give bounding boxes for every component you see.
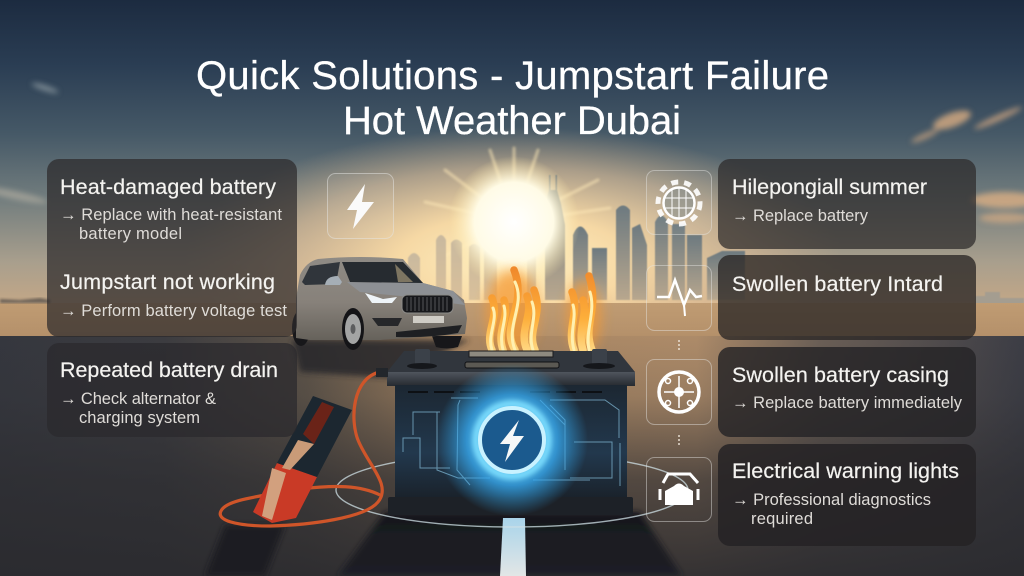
solution text bbox=[60, 390, 216, 427]
solution text: required bbox=[751, 510, 813, 528]
clouds bbox=[0, 81, 1024, 223]
battery body bbox=[395, 385, 627, 498]
panel: right three bbox=[718, 347, 976, 437]
panel: right two bbox=[718, 255, 976, 340]
icon: lightning box bbox=[328, 174, 394, 238]
car body bbox=[296, 257, 467, 340]
car windows bbox=[302, 262, 340, 285]
solution text: charging system bbox=[79, 409, 200, 427]
icon: circuit wheel box bbox=[646, 360, 712, 424]
shadow of car bbox=[292, 340, 470, 378]
shadow of clamp bbox=[205, 525, 285, 576]
title: Quick Solutions - Jumpstart Failure bbox=[196, 54, 829, 98]
skyline of Dubai bbox=[408, 175, 1024, 310]
circuit traces bbox=[403, 398, 620, 486]
arrow: connector to warning icon bbox=[678, 435, 680, 447]
arrow: connector to circuit icon bbox=[678, 340, 680, 352]
solution text bbox=[732, 491, 931, 528]
sun rays bbox=[425, 148, 610, 258]
hologram ring around battery bbox=[336, 453, 688, 527]
lightning bolt bbox=[500, 420, 524, 462]
solution text: → Perform battery voltage test bbox=[60, 302, 287, 320]
panel: left bottom bbox=[47, 343, 297, 437]
shadow under battery bbox=[338, 512, 682, 576]
glowing core bbox=[436, 364, 588, 516]
icon: pulse box bbox=[646, 266, 712, 330]
icon: gear globe box bbox=[646, 170, 712, 234]
heading: Swollen battery Intard bbox=[732, 272, 943, 296]
heading: Hilepongiall summer bbox=[732, 175, 927, 199]
road centre stripe bbox=[500, 518, 526, 576]
jumper clamp bbox=[253, 396, 352, 523]
heading: Swollen battery casing bbox=[732, 363, 949, 387]
background: desert sky at dusk bbox=[0, 0, 1024, 397]
icon: warning light box bbox=[646, 458, 712, 522]
panel: left top bbox=[47, 159, 297, 337]
title bbox=[196, 54, 829, 143]
desert sand bbox=[0, 298, 1024, 337]
panel: right four bbox=[718, 444, 976, 546]
solution text: → Replace battery bbox=[732, 207, 869, 225]
sun bbox=[448, 156, 580, 288]
flames bbox=[486, 270, 601, 354]
battery bbox=[387, 349, 635, 516]
panel: right one bbox=[718, 159, 976, 249]
heading: Electrical warning lights bbox=[732, 459, 959, 483]
headlight bbox=[365, 293, 397, 303]
car bbox=[292, 257, 467, 350]
road bbox=[0, 336, 1024, 576]
solution text: → Check alternator & bbox=[60, 390, 216, 408]
solution text: → Professional diagnostics bbox=[732, 491, 931, 509]
solution text: → Replace with heat-resistant bbox=[60, 206, 282, 224]
heading: Jumpstart not working bbox=[60, 270, 275, 294]
title: Hot Weather Dubai bbox=[343, 99, 681, 143]
heading: Repeated battery drain bbox=[60, 358, 278, 382]
solution text bbox=[60, 206, 282, 243]
cable bbox=[220, 372, 382, 526]
solution text: battery model bbox=[79, 225, 182, 243]
heading: Heat-damaged battery bbox=[60, 175, 276, 199]
grille bbox=[402, 295, 453, 313]
battery terminals bbox=[407, 349, 615, 369]
solution text: → Replace battery immediately bbox=[732, 394, 963, 412]
